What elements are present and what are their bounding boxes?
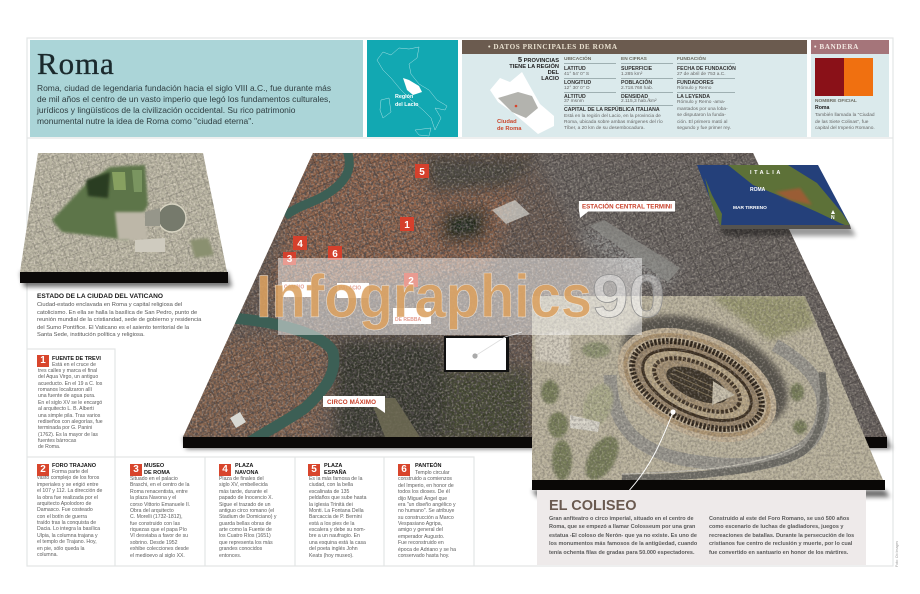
text: corso Vittorio Emanuele II. — [130, 502, 190, 508]
text: tres calles y marca el final — [38, 368, 97, 374]
intro text: jurídicos y lingüísticos de la civilización occidental. Su rico patrimonio — [37, 104, 295, 114]
panel: main data: SUPERFICIE — [621, 66, 652, 72]
text: una esquina está la casa — [309, 540, 366, 546]
text: VI desviaba a favor de su — [130, 533, 188, 539]
text: Barcaccia de P. Bernini — [309, 514, 362, 520]
text: el 107 y 112. La dirección de — [37, 488, 102, 494]
text: DE ROMA — [144, 470, 170, 476]
panel: main data: CAPITAL DE LA REPÚBLICA ITALIANA — [564, 107, 660, 113]
text: del Aqua Virgo, un antiguo — [38, 374, 98, 380]
map place labels — [282, 201, 675, 413]
text: escalera y debe su nom- — [309, 527, 365, 533]
text: siglo XV, embellecida — [219, 482, 268, 488]
panel: main data: Rómulo y Remo — [677, 86, 711, 90]
text: Dacia. Lo integra la basílica — [37, 526, 100, 532]
panel: main data: 41° 54' 0" S — [564, 72, 589, 77]
text: Sigue el trazado de un — [219, 502, 270, 508]
text: acueducto. En el 19 a C. los — [38, 381, 102, 387]
map label: Ciudad de Roma: Ciudad — [497, 119, 517, 125]
panel: main data: 2.115,3 hab./km² — [621, 99, 657, 104]
text: antiguo circo romano (el — [219, 508, 274, 514]
text: época de Adriano y se ha — [398, 546, 456, 552]
Coliseo column 1: los monumentos más famosos de la antigüedad, cuando — [549, 541, 697, 547]
map label: Región — [395, 94, 413, 100]
text: PLAZA — [235, 463, 253, 469]
panel header — [811, 40, 889, 54]
panel: main data: LATITUD — [564, 66, 586, 72]
map: Lazio provinces — [490, 72, 554, 134]
text: FUENTE DE TREVI — [52, 356, 101, 362]
note 2: Foro Trajano — [37, 463, 102, 558]
text: Monti. La Fontana Della — [309, 508, 364, 514]
Coliseo column 2: como escenario de luchas de gladiadores, juegos y — [709, 524, 844, 530]
panel: flag: NOMBRE OFICIAL — [815, 99, 857, 104]
text: dijo Miguel Ángel que — [398, 496, 447, 502]
column: founding — [677, 56, 736, 131]
Vatican text — [37, 302, 202, 338]
text: PLAZA — [324, 463, 342, 469]
map place labels: ESTACIÓN CENTRAL TERMINI — [582, 202, 672, 210]
text: Templo circular — [415, 470, 450, 476]
white cut-out with pointer — [444, 332, 522, 372]
panel: flag: Roma — [815, 105, 829, 111]
panel: main data: Está en la región del Lacio, en la provincia de — [564, 114, 661, 118]
panel: flag: de las Siete Colinas", fue — [815, 120, 868, 125]
text: Braschi, en el centro de la — [130, 482, 189, 488]
map: Italy outline with Lazio — [376, 46, 448, 136]
panel: main data: FECHA DE FUNDACIÓN — [677, 66, 736, 72]
watermark: Infographics — [256, 263, 592, 330]
Vatican aerial map — [15, 150, 235, 287]
text: peldaños que sube hasta — [309, 495, 366, 501]
text: imperiales y se erigió entre — [37, 482, 98, 488]
text: emperador Augusto. — [398, 534, 444, 540]
flag of Rome — [815, 58, 873, 96]
Coliseo column 1: Gran anfiteatro o circo imperial, situado en el centro de — [549, 516, 694, 522]
text: Situado en el palacio — [130, 476, 178, 482]
text: 5 — [311, 464, 317, 475]
text: sobrino. Desde 1952 — [130, 540, 177, 546]
Coliseo column 1: tenía ochenta filas de gradas para 50.000 espectadores. — [549, 550, 695, 556]
text: Damasco. Fue costeado — [37, 507, 93, 513]
text: Roma renacentista, entre — [130, 489, 188, 495]
text: 1 — [40, 355, 46, 366]
panel: main data — [462, 40, 807, 137]
panel header: • DATOS PRINCIPALES DE ROMA — [488, 43, 618, 51]
panel: main data: ción. El primero mató al — [677, 120, 727, 125]
text: amigo y general del — [398, 527, 443, 533]
text: una fuente de agua pura. — [38, 393, 95, 399]
text: Es la más famosa de la — [309, 476, 362, 482]
stat: provinces: DEL — [548, 70, 559, 76]
stat: provinces: 5 PROVINCIAS — [518, 54, 559, 64]
text: bre a un naufragio. En — [309, 533, 360, 539]
text: entonces. — [219, 552, 241, 558]
text: columna. — [37, 552, 58, 558]
text: NAVONA — [235, 470, 258, 476]
Coliseo column 2: cristianos fue centro de reclusión y muerte, por lo cual — [709, 541, 852, 547]
panel: main data: segundo y fue primer rey. — [677, 126, 731, 131]
main aerial map of Rome — [170, 150, 900, 449]
note 1: Fuente de Trevi — [37, 355, 103, 450]
inset map of Italy: ROMA — [750, 187, 766, 193]
watermark: 90 — [592, 263, 665, 330]
text: más tarde, durante el — [219, 489, 268, 495]
panel: main data: DENSIDAD — [621, 94, 648, 100]
text: no humano". Se atribuye — [398, 508, 454, 514]
Vatican text: Ciudad-estado enclavada en Roma y capital religiosa del — [37, 302, 182, 308]
text: 6 — [401, 464, 407, 475]
panel: title and intro — [30, 40, 363, 137]
panel: main data: LONGITUD — [564, 80, 591, 86]
text: la iglesia Trinità dei — [309, 502, 353, 508]
text: arquitecto Apolodoro de — [37, 501, 91, 507]
text: conservado hasta hoy. — [398, 553, 449, 559]
text: los Cuatro Ríos (1651) — [219, 533, 271, 539]
text block: El Coliseo — [549, 498, 854, 556]
map number markers: 6 — [332, 249, 338, 260]
text: ciudad, con la bella — [309, 482, 353, 488]
text: fuentes bárrocas — [38, 438, 76, 444]
panel: main data: mantados por una loba- — [677, 107, 728, 112]
Colosseum aerial panel — [530, 292, 890, 497]
text: Keats (hoy museo). — [309, 552, 354, 558]
text: construido a comienzos — [398, 476, 452, 482]
Coliseo column 2: fue convertido en santuario en honor de los mártires. — [709, 550, 848, 556]
text: C. Morelli (1732-1812), — [130, 514, 183, 520]
text: guarda bellas obras de — [219, 521, 271, 527]
map label: Ciudad de Roma — [497, 119, 522, 132]
text: MUSEO — [144, 463, 164, 469]
note 5: Plaza España — [308, 463, 366, 558]
text: al arquitecto L. B. Alberti — [38, 406, 94, 412]
stat: provinces — [509, 54, 559, 82]
capital note — [564, 105, 673, 131]
panel header: • BANDERA — [814, 43, 859, 51]
map number markers: 1 — [404, 220, 410, 231]
column: figures — [621, 57, 673, 104]
panel: locator map of Italy — [367, 40, 458, 137]
Coliseo column 1: Roma, que se empezó a llamar Colosseum por una gran — [549, 524, 695, 530]
text: riquezas que el papa Pío — [130, 527, 187, 533]
title: Roma — [37, 46, 115, 81]
text: Fue reconstruido en — [398, 540, 444, 546]
text: 2 — [40, 464, 46, 475]
Vatican text: reunión mundial de la cristiandad, sede de gobierno y residencia — [37, 317, 201, 323]
text: Ulpia, la columna trajana y — [37, 533, 98, 539]
text: con el botín de guerra — [37, 514, 87, 520]
map place labels: CIRCO MÁXIMO — [327, 397, 376, 406]
text: terminada por G. Panini — [38, 425, 92, 431]
flag caption — [815, 99, 875, 131]
panel: main data: 12° 30' 0" O — [564, 86, 590, 90]
panel: main data: EN CIFRAS — [621, 57, 647, 62]
text: exhibe colecciones desde — [130, 546, 189, 552]
panel: main data: 27 de abril de 753 a.C. — [677, 72, 726, 77]
Vatican text: Santa Sede, institución política y religiosa. — [37, 332, 145, 338]
panel: main data: Tíber, a 20 km de su desembocadura. — [564, 126, 645, 131]
inset map of Italy: ITALIA — [750, 170, 783, 176]
map label — [395, 94, 418, 108]
panel: flag — [811, 40, 889, 137]
text: Vespasiano Agripa, — [398, 521, 442, 527]
inset map of Italy — [690, 160, 860, 236]
text: FORO TRAJANO — [52, 463, 96, 469]
inset map of Italy: MAR TIRRENO — [733, 205, 767, 211]
text: todos los dioses. De él — [398, 489, 450, 495]
Coliseo column 2 — [709, 516, 854, 556]
text: 4 — [222, 464, 228, 475]
map number markers: 5 — [419, 167, 425, 178]
map place labels: CAMINO — [284, 284, 304, 290]
Coliseo text background — [537, 490, 866, 565]
text: romanos localizaron allí — [38, 387, 92, 393]
panel: main data: LA LEYENDA — [677, 94, 710, 100]
text: papado de Inocencio X. — [219, 495, 273, 501]
intro text: Roma, ciudad de legendaria fundación hacia el siglo VIII a.C., fue durante más — [37, 82, 331, 92]
text: vasto complejo de los foros — [37, 475, 99, 481]
panel: flag: capital del Imperio Romano. — [815, 126, 875, 131]
panel: main data: FUNDADORES — [677, 80, 714, 86]
note 4: Plaza Navona — [219, 463, 276, 558]
intro text: monumental nutre la idea de Roma como "ciudad eterna". — [37, 116, 254, 126]
text: PANTEÓN — [415, 463, 441, 469]
panel: main data: UBICACIÓN — [564, 57, 591, 62]
map label: Ciudad de Roma: de Roma — [497, 126, 521, 132]
map place labels: PALACIO — [339, 286, 361, 292]
panel header — [462, 40, 807, 54]
text: Obra del arquitecto — [130, 508, 174, 514]
text: 3 — [133, 464, 139, 475]
text: ESPAÑA — [324, 470, 347, 476]
text: escalinata de 135 — [309, 489, 349, 495]
text: en pie, sólo queda la — [37, 546, 84, 552]
text: Está en el cruce de — [52, 362, 96, 368]
panel: flag: También llamada la "Ciudad — [815, 113, 875, 118]
panel: main data: FUNDACIÓN — [677, 57, 706, 62]
map number markers: 2 — [408, 276, 414, 287]
text: rediseños con alegorías, fue — [38, 419, 103, 425]
text: Plaza de finales del — [219, 476, 264, 482]
panel: main data: Roma, ubicada sobre ambas márgenes del río — [564, 120, 663, 125]
Coliseo heading: EL COLISEO — [549, 498, 637, 514]
column: location — [564, 56, 616, 104]
panel: main data: 37 msnm — [564, 99, 584, 104]
map place labels: DE REBBA — [395, 317, 422, 323]
note 6: Panteón — [398, 462, 456, 559]
text: grandes conocidos — [219, 546, 262, 552]
panel: main data: Rómulo y Remo -ama- — [677, 100, 725, 105]
Coliseo column 1 — [549, 516, 697, 556]
panel: main data: 2.718.768 hab. — [621, 86, 653, 90]
text: el templo de Trajano. Hoy, — [37, 539, 97, 545]
text: su construcción a Marco — [398, 515, 454, 521]
stat: provinces: TIENE LA REGIÓN — [509, 64, 559, 70]
Coliseo column 2: Construido al este del Foro Romano, se usó 500 años — [709, 516, 849, 522]
photo credit: Foto: Ob Images — [895, 541, 899, 567]
Coliseo column 1: estatua -El coloso de Nerón- que ya no existe. Es uno de — [549, 532, 697, 538]
stat: provinces: LACIO — [541, 76, 559, 82]
text: era "un diseño angélico y — [398, 502, 456, 508]
map number markers: 3 — [287, 254, 293, 265]
text: arte como la Fuente de — [219, 527, 272, 533]
panel: main data: 1.285 km² — [621, 72, 642, 77]
intro text — [36, 82, 331, 126]
text: del Imperio, en honor de — [398, 483, 454, 489]
text: Forma parte del — [52, 469, 88, 475]
text: la obra fue realizada por el — [37, 494, 98, 500]
Vatican text: catolicismo. En ella se halla la basílica de San Pedro, punto de — [37, 310, 197, 316]
map label: del Lacio — [395, 102, 418, 108]
intro text: de mil años el centro de un vasto imperio que legó los fundamentos culturales, — [37, 94, 331, 104]
text: traído tras la conquista de — [37, 520, 96, 526]
panel: main data: se disputaron la funda- — [677, 113, 726, 118]
text: En el siglo XV se le encargó — [38, 400, 102, 406]
text: (1762). Es la mayor de las — [38, 432, 98, 438]
text: está a los pies de la — [309, 521, 354, 527]
map number markers: 4 — [297, 239, 303, 250]
inset map of Italy: N — [831, 215, 835, 221]
text: el medioevo al siglo XX. — [130, 552, 185, 558]
note 3: Museo de Roma — [130, 463, 190, 558]
text: que representa los más — [219, 540, 273, 546]
text: del poeta inglés John — [309, 546, 358, 552]
text: Stadium de Domiciano) y — [219, 514, 276, 520]
Vatican text: del Sumo Pontífice. El Vaticano es el asiento territorial de la — [37, 324, 189, 330]
map number markers — [283, 164, 429, 287]
text block: Vatican — [37, 293, 202, 338]
Vatican heading: ESTADO DE LA CIUDAD DEL VATICANO — [37, 293, 163, 300]
text: de Roma. — [38, 444, 60, 450]
Coliseo column 2: recreaciones de batallas. Durante la persecución de los — [709, 532, 854, 538]
text: la plaza Navona y el — [130, 495, 176, 501]
panel: main data: POBLACIÓN — [621, 80, 652, 86]
text: una simple pila. Tras varios — [38, 412, 100, 418]
panel: main data: ALTITUD — [564, 94, 586, 100]
text: fue construido con las — [130, 521, 180, 527]
